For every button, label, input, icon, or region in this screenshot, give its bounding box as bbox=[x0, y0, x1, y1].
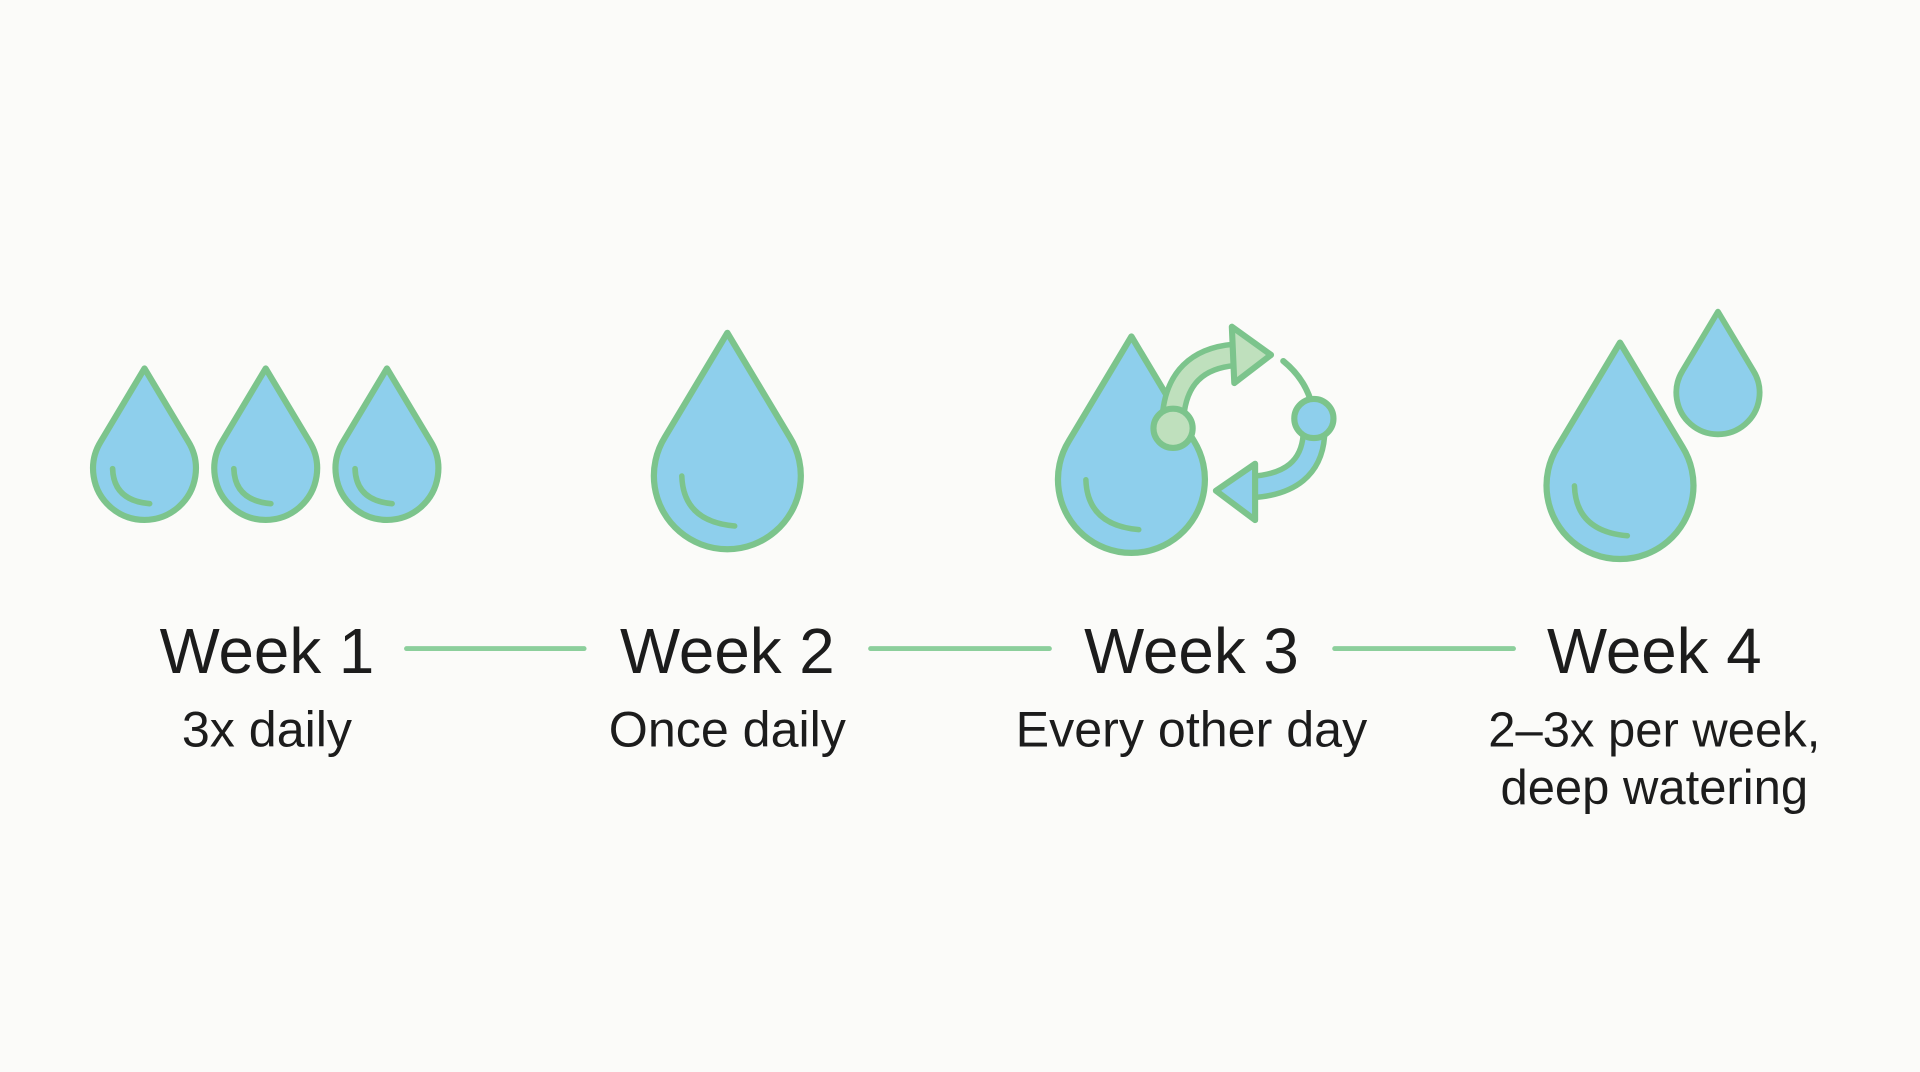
label: week 3 bbox=[1016, 616, 1367, 757]
label: week 2: Week 2 bbox=[620, 616, 835, 687]
label: week 4: 2–3x per week, bbox=[1488, 703, 1820, 757]
connector lines bbox=[407, 647, 1513, 651]
label: week 2: Once daily bbox=[609, 701, 846, 757]
icon: drop with cycle arrows week 3 bbox=[1058, 327, 1333, 553]
label: week 3: Every other day bbox=[1016, 701, 1367, 757]
label: week 4 bbox=[1488, 616, 1820, 815]
label: week 4: Week 4 bbox=[1547, 616, 1762, 687]
icon: big and small drops week 4 bbox=[1547, 312, 1760, 559]
label: week 1: Week 1 bbox=[160, 616, 374, 687]
label: week 2 bbox=[609, 616, 846, 757]
label: week 3: Week 3 bbox=[1084, 616, 1299, 687]
icon: single drop week 2 bbox=[654, 333, 801, 549]
label: week 4: deep watering bbox=[1500, 761, 1808, 815]
label: week 1 bbox=[160, 616, 374, 757]
icon: three drops week 1 bbox=[93, 368, 438, 520]
label: week 1: 3x daily bbox=[182, 701, 352, 757]
